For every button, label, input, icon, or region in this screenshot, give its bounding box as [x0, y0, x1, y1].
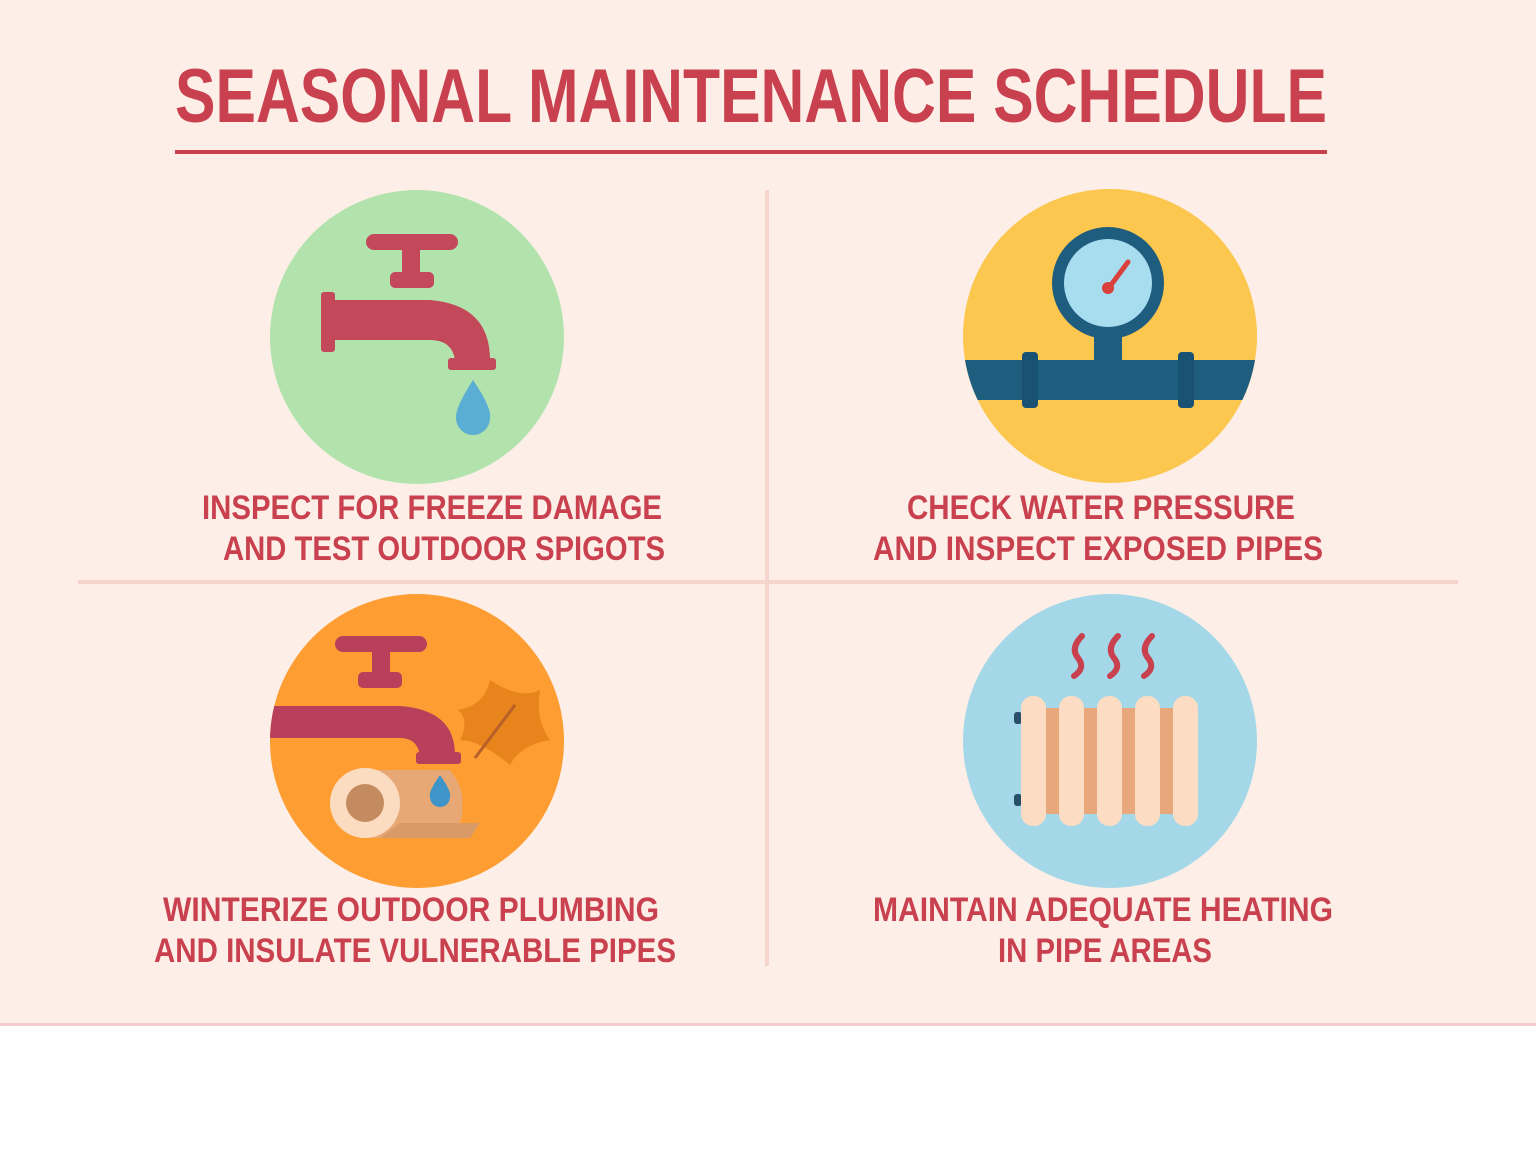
text: winterize — [154, 891, 676, 970]
text: heating: IN PIPE AREAS — [998, 932, 1212, 970]
text: pressure: CHECK WATER PRESSURE — [907, 489, 1295, 527]
panel: heating — [873, 594, 1333, 970]
text: heating: MAINTAIN ADEQUATE HEATING — [873, 891, 1333, 929]
text: winterize: WINTERIZE OUTDOOR PLUMBING — [163, 891, 659, 929]
icon: pressure gauge on pipe — [960, 189, 1260, 483]
text: winterize: AND INSULATE VULNERABLE PIPES — [154, 932, 676, 970]
text: pressure: AND INSPECT EXPOSED PIPES — [873, 530, 1323, 568]
text: pressure — [873, 489, 1323, 568]
text: spigots: AND TEST OUTDOOR SPIGOTS — [223, 530, 665, 568]
panel: pressure — [873, 189, 1323, 568]
text: spigots: INSPECT FOR FREEZE DAMAGE — [202, 489, 662, 527]
icon: faucet, insulation, leaf — [260, 594, 564, 888]
panel: spigots — [202, 190, 665, 568]
text: spigots — [202, 489, 665, 568]
icon: radiator with heat — [963, 594, 1257, 888]
text: heating — [873, 891, 1333, 970]
icon: faucet with drop — [270, 190, 564, 484]
panel: winterize — [154, 594, 676, 970]
